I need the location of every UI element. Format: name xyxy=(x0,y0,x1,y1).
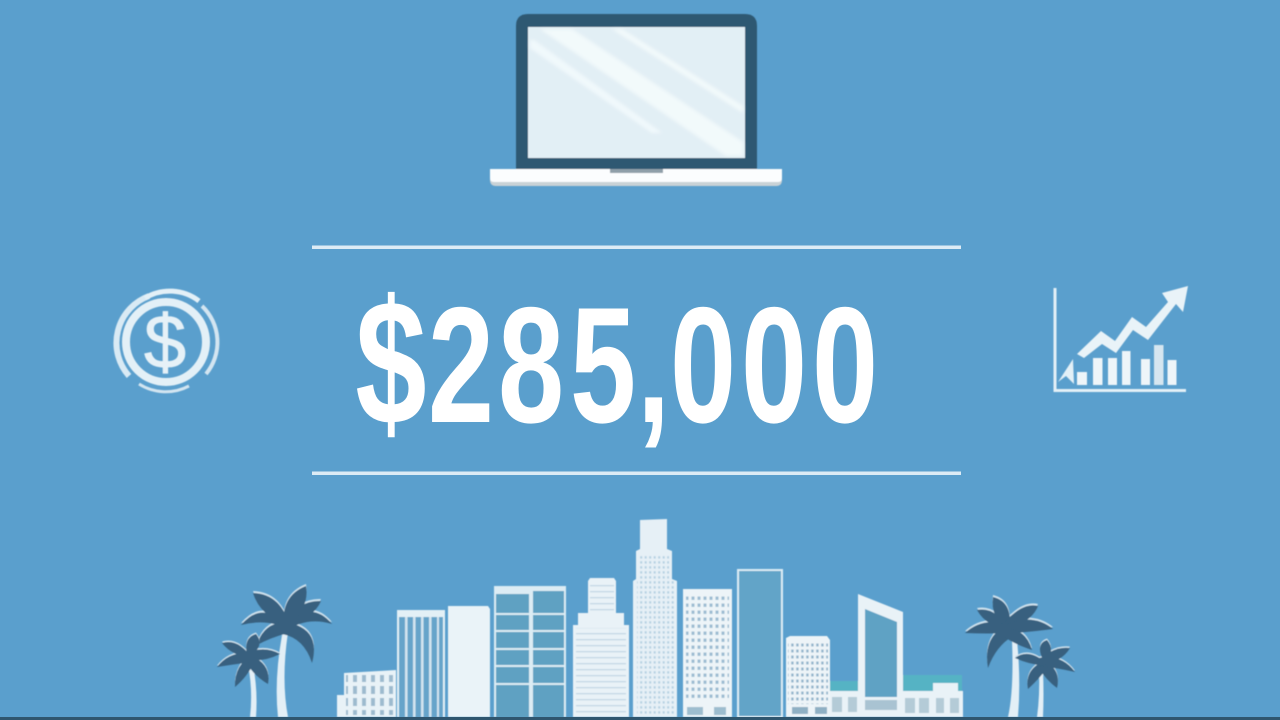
icon: growth chart xyxy=(1055,286,1188,390)
coin ring xyxy=(126,302,206,382)
building: low podium xyxy=(830,675,963,717)
building: low block xyxy=(337,670,396,717)
chart axes xyxy=(1055,288,1186,390)
icon: dollar coin xyxy=(116,291,217,392)
city skyline xyxy=(217,519,1075,717)
screen reflections xyxy=(530,29,743,156)
palm: left small xyxy=(217,632,280,717)
laptop lid xyxy=(516,14,757,169)
palm: right large xyxy=(965,595,1053,717)
dollar sign: $ xyxy=(144,300,186,385)
building: glass frame tower xyxy=(494,586,566,717)
coin outer arcs xyxy=(116,296,149,376)
laptop base xyxy=(490,169,782,186)
chart arrow xyxy=(1077,286,1188,358)
laptop screen xyxy=(528,27,745,158)
building: solid tower xyxy=(448,606,490,717)
laptop notch xyxy=(610,169,663,173)
palm: left large xyxy=(241,584,332,717)
bottom divider xyxy=(312,472,961,475)
palm: right small xyxy=(1015,638,1075,717)
building: window grid tower xyxy=(683,589,732,717)
building: small window tower xyxy=(786,636,830,717)
building: striped tower xyxy=(397,610,445,717)
building: glass outline tower xyxy=(738,570,782,717)
top divider xyxy=(312,246,961,249)
icon: laptop xyxy=(490,14,782,186)
ground line xyxy=(0,717,1280,720)
chart small wedge xyxy=(1058,359,1074,384)
chart bars xyxy=(1077,345,1176,385)
building: slanted frame xyxy=(858,594,903,717)
building: tallest tower xyxy=(633,519,677,717)
building: stepped tower xyxy=(573,578,629,717)
headline amount: $ xyxy=(355,263,427,462)
headline amount: 285,000 xyxy=(428,274,878,458)
